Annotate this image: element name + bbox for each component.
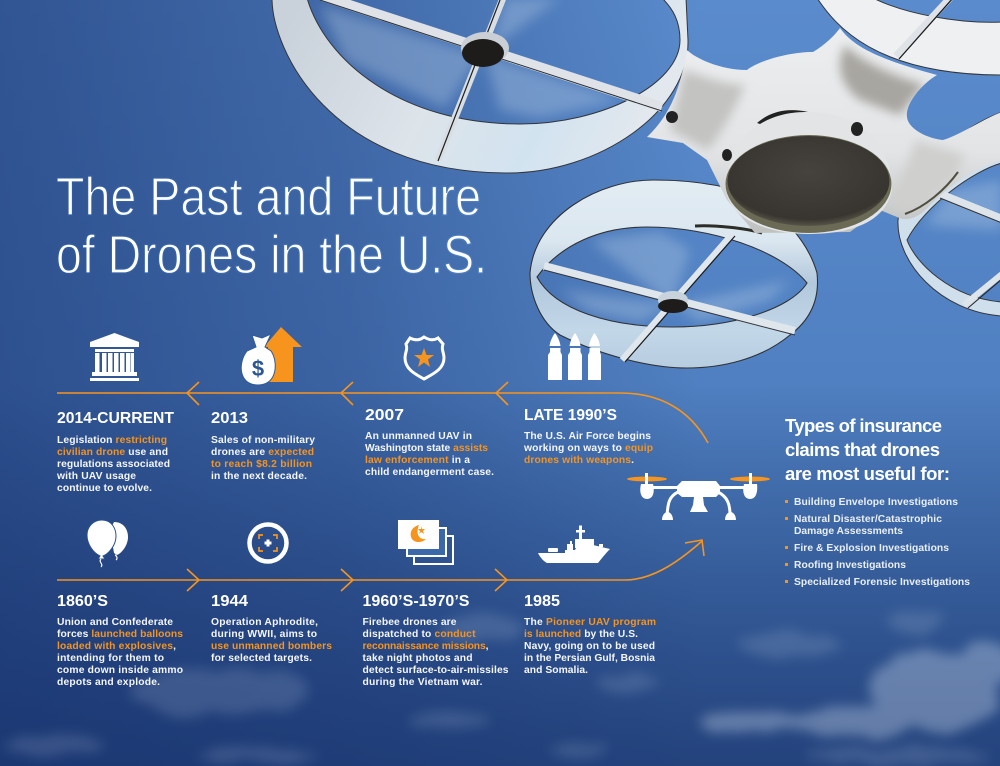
icon: money bag with rising arrow [241, 327, 302, 385]
timeline entry: 2007: 2007 [365, 407, 404, 424]
icon: police badge [405, 337, 444, 379]
lower ring [530, 180, 818, 368]
icon: balloons [87, 520, 128, 567]
insurance claims heading: are most useful for: [785, 463, 950, 484]
insurance claims list: Roofing Investigations [794, 560, 906, 571]
timeline entry: 2013 [211, 410, 315, 482]
timeline entry: 2014-current: regulations associated [57, 459, 170, 470]
timeline entry: 1860's [57, 593, 183, 688]
timeline entry: 2013: drones are expected [211, 447, 314, 458]
timeline entry: 2013: Sales of non-military [211, 435, 315, 446]
timeline entry: 1944: for selected targets. [211, 653, 312, 664]
timeline entry: 1960's-1970's: reconnaissance missions, [362, 641, 489, 652]
timeline entry: 1944: 1944 [211, 593, 248, 610]
timeline entry: 1960's-1970's [362, 593, 509, 688]
timeline entry: 1985: The Pioneer UAV program [524, 617, 656, 628]
icon: bullets [548, 333, 601, 380]
timeline entry: 1985: and Somalia. [524, 665, 588, 676]
timeline entry: 1960's-1970's: 1960’S-1970’S [362, 593, 470, 610]
timeline entry: 1860's: intending for them to [57, 653, 164, 664]
timeline entry: 2014-current: with UAV usage [56, 471, 136, 482]
insurance claims list: Building Envelope Investigations [794, 497, 958, 508]
insurance claims list: Specialized Forensic Investigations [794, 577, 970, 588]
timeline entry: late 1990's: LATE 1990’S [524, 407, 617, 424]
icon: government building [90, 333, 139, 381]
upper timeline arrow (right to left) [57, 382, 708, 443]
timeline entry: 1960's-1970's: Firebee drones are [362, 617, 457, 628]
timeline entry: 2013: in the next decade. [211, 471, 307, 482]
lower timeline arrow (left to right) [57, 540, 704, 591]
timeline entry: 1860's: come down inside ammo [57, 665, 183, 676]
insurance claims list: Natural Disaster/Catastrophic [794, 514, 942, 525]
timeline entry: 1960's-1970's: during the Vietnam war. [362, 677, 483, 688]
insurance claims list: Damage Assessments [794, 526, 903, 537]
insurance claims heading [785, 415, 950, 484]
timeline entry: 1985: in the Persian Gulf, Bosnia [524, 653, 655, 664]
timeline entry: late 1990's: The U.S. Air Force begins [524, 431, 651, 442]
rotor blur [320, 0, 1000, 322]
insurance claims heading: claims that drones [785, 439, 940, 460]
insurance claims list [785, 497, 970, 588]
drone body [647, 28, 1000, 233]
timeline entry: 1944: Operation Aphrodite, [211, 617, 318, 628]
icon: money bag with rising arrow: $ [252, 356, 264, 381]
right ring [898, 112, 1000, 316]
upper left ring [272, 0, 688, 173]
timeline entry: 1944 [211, 593, 332, 664]
timeline entry: 2013: 2013 [211, 410, 248, 427]
timeline entry: 2007: law enforcement in a [365, 455, 470, 466]
timeline entry: 1985: Navy, going on to be used [524, 641, 655, 652]
timeline entry: late 1990's [523, 407, 653, 466]
timeline entry: 1860's: loaded with explosives, [57, 641, 176, 652]
timeline entry: 1860's: depots and explode. [57, 677, 160, 688]
timeline entry: 1944: use unmanned bombers [211, 641, 332, 652]
timeline entry: 1985 [524, 593, 656, 676]
camera lens [666, 110, 892, 234]
drone photo [272, 0, 1000, 368]
timeline entry: 2007: child endangerment case. [365, 467, 494, 478]
timeline entry: 2007: Washington state assists [365, 443, 488, 454]
timeline entry: 2014-current: civilian drone use and [57, 447, 168, 458]
timeline entry: 2014-current: 2014-CURRENT [57, 410, 175, 427]
timeline entry: late 1990's: working on ways to equip [523, 443, 653, 454]
title: The Past and Future [56, 167, 481, 227]
icon: quadcopter [627, 473, 770, 520]
timeline entry: 2007 [365, 407, 494, 478]
timeline entry: 1985: is launched by the U.S. [524, 629, 638, 640]
timeline entry: 1985: 1985 [524, 593, 560, 610]
timeline entry: 2007: An unmanned UAV in [365, 431, 472, 442]
timeline entry: 2014-current: Legislation restricting [57, 435, 167, 446]
timeline entry: late 1990's: drones with weapons. [524, 455, 634, 466]
insurance claims heading: Types of insurance [785, 415, 942, 436]
timeline entry: 2013: to reach $8.2 billion [211, 459, 312, 470]
timeline entry: 1960's-1970's: dispatched to conduct [362, 629, 476, 640]
clouds [5, 611, 1000, 765]
timeline entry: 1960's-1970's: take night photos and [362, 653, 472, 664]
title [56, 167, 487, 285]
timeline entry: 2014-current: continue to evolve. [57, 483, 152, 494]
timeline entry: 1960's-1970's: detect surface-to-air-missiles [362, 665, 509, 676]
timeline entry: 1860's: forces launched balloons [57, 629, 183, 640]
upper right ring [817, 0, 1000, 75]
icon: navy ship [538, 526, 610, 563]
title: of Drones in the U.S. [56, 225, 487, 285]
insurance claims list: Fire & Explosion Investigations [794, 543, 949, 554]
timeline entry: 1944: during WWII, aims to [211, 629, 317, 640]
icon: target reticle [250, 524, 286, 562]
icon: night photos [398, 520, 453, 564]
timeline entry: 1860's: 1860’S [57, 593, 108, 610]
timeline entry: 2014-current [56, 410, 175, 494]
timeline entry: 1860's: Union and Confederate [57, 617, 173, 628]
